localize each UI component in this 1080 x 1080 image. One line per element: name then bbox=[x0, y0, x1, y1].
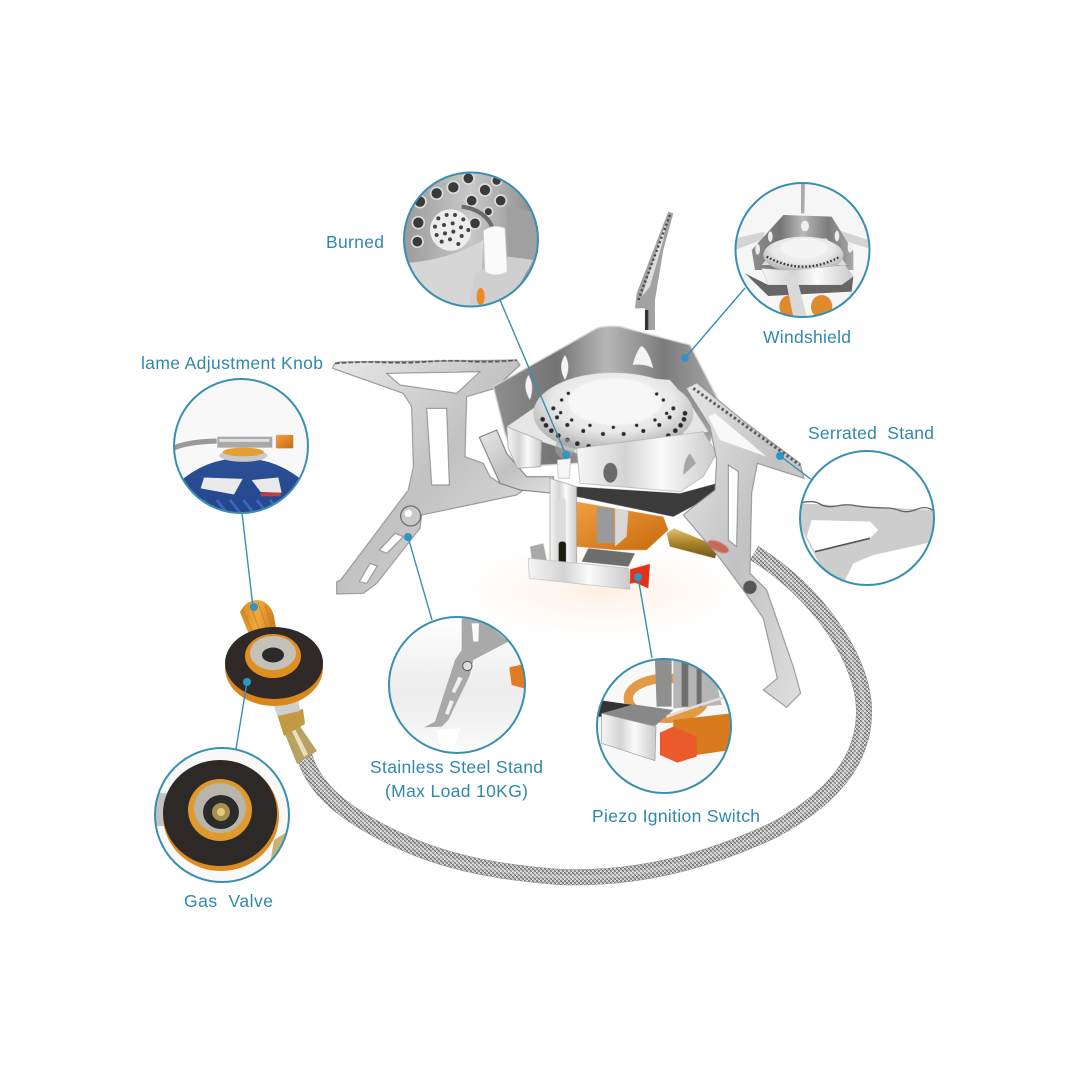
left label bbox=[201, 477, 243, 495]
detail circle: serrated stand bbox=[800, 451, 935, 586]
mini windshield wall bbox=[752, 215, 853, 270]
label: serrated stand: Serrated Stand bbox=[808, 423, 934, 443]
round base plate bbox=[225, 630, 323, 706]
mini front wall bbox=[762, 265, 853, 285]
orange knob bbox=[276, 435, 293, 448]
bar highlight bbox=[219, 439, 269, 442]
detail circle: gas valve bbox=[155, 748, 290, 882]
label: burned: Burned bbox=[326, 232, 384, 252]
side screw block bbox=[530, 543, 547, 560]
left hinge plate bbox=[479, 430, 553, 493]
dome highlight bbox=[568, 378, 662, 425]
valve bar bbox=[217, 437, 272, 448]
electrode bracket bbox=[550, 478, 577, 565]
silver rods bbox=[673, 660, 722, 708]
windshield right front wall bbox=[577, 432, 717, 492]
block top bbox=[602, 704, 673, 726]
red orange switch bbox=[660, 727, 697, 763]
valve opening bbox=[262, 648, 284, 662]
ceramic insulator bbox=[483, 226, 507, 275]
right arm serration bbox=[693, 388, 800, 465]
back arm bbox=[801, 183, 805, 213]
mini dome bbox=[763, 237, 843, 273]
brass pin bbox=[217, 808, 225, 816]
orange base right bbox=[811, 295, 832, 315]
ignition block top bbox=[582, 548, 635, 567]
rod shadow bbox=[682, 660, 702, 707]
label: stainless steel stand bbox=[370, 757, 543, 801]
right stand arm bbox=[683, 383, 804, 707]
orange ring arc bbox=[628, 678, 705, 718]
circle outline bbox=[597, 659, 731, 793]
circle outline bbox=[736, 183, 870, 317]
circle outline bbox=[800, 451, 934, 585]
serrated edge bbox=[802, 502, 933, 512]
side serrated arms bbox=[735, 230, 868, 250]
braided gas hose bbox=[304, 553, 864, 877]
stove body bbox=[333, 326, 804, 707]
black disc bbox=[163, 760, 277, 866]
label: gas valve: Gas Valve bbox=[184, 891, 273, 911]
right arm inner slot bbox=[708, 413, 767, 457]
ignition block front bbox=[528, 558, 630, 589]
perforated spreader disc bbox=[430, 209, 471, 251]
hose end fitting bbox=[270, 696, 317, 764]
hose bbox=[173, 441, 217, 448]
windshield left front wall bbox=[507, 427, 542, 468]
orange part bbox=[509, 664, 524, 688]
bracket slot bbox=[559, 498, 566, 567]
serrated top edge bbox=[335, 360, 517, 363]
dark opening bbox=[203, 795, 239, 829]
brass connector bbox=[667, 528, 718, 558]
windshield back wall bbox=[493, 326, 720, 467]
burner dome bbox=[533, 373, 693, 454]
mini floor bbox=[762, 238, 847, 265]
curved metal strip bbox=[667, 697, 727, 717]
tank stripes bbox=[204, 499, 274, 512]
label: piezo ignition switch: Piezo Ignition Switch bbox=[592, 806, 760, 826]
serrated blade bbox=[800, 503, 934, 583]
circle outline bbox=[155, 748, 289, 882]
side wall vent bbox=[683, 453, 696, 475]
lock ball joint bbox=[401, 506, 421, 526]
silver bracket bbox=[472, 256, 534, 305]
knurled orange wheel bbox=[673, 713, 731, 755]
label: flame adjustment knob: lame Adjustment Knob bbox=[141, 353, 323, 373]
windshield floor bbox=[507, 378, 708, 453]
fitting right bbox=[270, 832, 286, 860]
detail circle: flame adjustment knob bbox=[173, 378, 309, 514]
orange burner base bbox=[577, 502, 668, 550]
threaded gold ring bbox=[245, 634, 301, 678]
mini vents bbox=[755, 221, 852, 255]
red reflection bbox=[706, 538, 731, 556]
orange base left bbox=[779, 295, 794, 316]
silver thread bbox=[194, 783, 246, 833]
burner perforations bbox=[412, 173, 506, 247]
gold collar bbox=[223, 448, 264, 456]
threaded screw bbox=[655, 660, 672, 707]
label: windshield: Windshield bbox=[763, 327, 851, 347]
ceramic electrode bbox=[557, 458, 571, 478]
detail circle: stainless steel stand bbox=[389, 617, 525, 753]
front wall vent bbox=[603, 463, 617, 483]
slot shadow bbox=[815, 538, 870, 552]
burner mounting plate bbox=[577, 483, 717, 517]
circle outline bbox=[404, 172, 538, 306]
windshield vent holes bbox=[525, 346, 653, 400]
silver thread bbox=[250, 636, 296, 670]
lower skirt bbox=[409, 240, 484, 306]
brass pin ring bbox=[212, 803, 230, 821]
fitting left bbox=[156, 792, 167, 826]
gold rim bbox=[163, 761, 279, 871]
detail circle: burner bbox=[403, 172, 540, 313]
detail circle: piezo ignition switch bbox=[597, 659, 731, 793]
electrode wire head bbox=[555, 438, 575, 458]
ignition wire bbox=[462, 207, 493, 230]
dark strip bbox=[598, 700, 633, 717]
mini dome holes bbox=[767, 257, 840, 267]
spreader holes bbox=[433, 213, 470, 246]
red strip bbox=[261, 493, 281, 496]
gas tank bbox=[184, 460, 299, 512]
mini stand leg bbox=[424, 618, 508, 727]
label: stainless steel stand: (Max Load 10KG) bbox=[385, 781, 528, 801]
gold ring bbox=[188, 779, 252, 841]
detail circle: windshield bbox=[735, 183, 870, 318]
right steel panel bbox=[524, 210, 537, 272]
callout dots bbox=[243, 354, 784, 686]
stove floor glow bbox=[430, 530, 770, 650]
leader lines and dots bbox=[236, 288, 812, 749]
block front bbox=[602, 713, 656, 761]
mini ball joint bbox=[463, 661, 472, 671]
burner holes bbox=[540, 392, 687, 451]
circle outline bbox=[174, 379, 308, 513]
gas valve assembly bbox=[225, 600, 323, 764]
mini mount plate bbox=[745, 273, 853, 296]
center bracket bbox=[786, 284, 806, 316]
ball highlight bbox=[405, 510, 412, 517]
tank neck bbox=[219, 452, 268, 462]
mini dome highlight bbox=[812, 239, 828, 248]
black rubber disc bbox=[225, 627, 323, 699]
adjustment knob bbox=[240, 600, 276, 642]
orange part bbox=[477, 288, 485, 305]
right label bbox=[252, 477, 282, 493]
silver post bbox=[615, 508, 628, 547]
bracket lower slot bbox=[559, 542, 566, 565]
circle outline bbox=[389, 617, 525, 753]
back serrated arm of the stove bbox=[635, 212, 673, 330]
reflection bbox=[437, 728, 460, 750]
label: stainless steel stand: Stainless Steel Stand bbox=[370, 757, 543, 777]
threaded gas post bbox=[597, 507, 615, 543]
right arm hinge bolt bbox=[743, 581, 757, 594]
red ignition switch bbox=[630, 564, 650, 588]
left stand arm and leg bbox=[333, 360, 523, 594]
